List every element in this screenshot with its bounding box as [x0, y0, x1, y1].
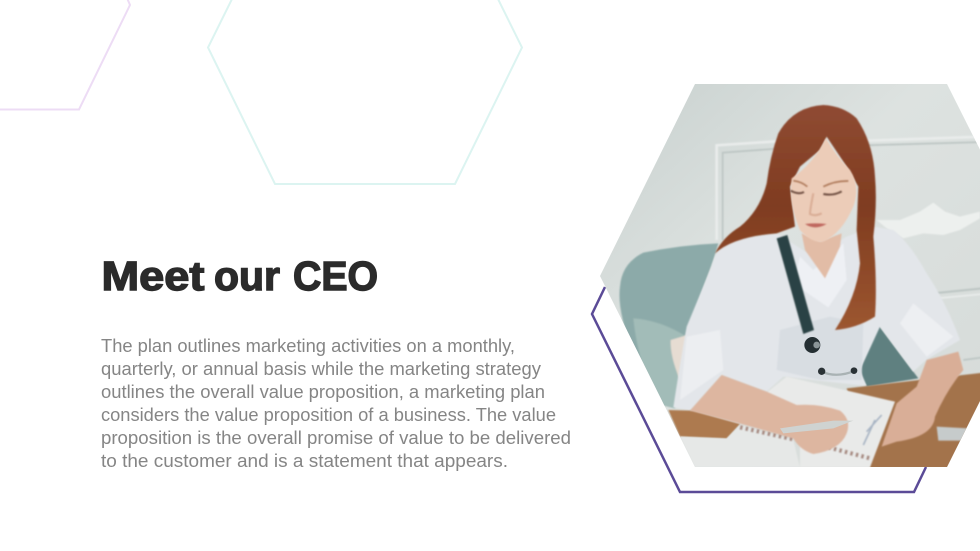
title: Meet [102, 253, 205, 299]
neck [802, 233, 842, 278]
body paragraph: The plan outlines marketing activities on a monthly, [101, 336, 515, 356]
right forearm and hand [882, 352, 963, 447]
wall moulding [717, 137, 980, 360]
handwriting [863, 415, 882, 445]
title [102, 253, 378, 299]
decorative hexagon outline: purple [592, 287, 926, 492]
pill pack [937, 427, 968, 441]
wall ornament [877, 203, 980, 238]
title: our [214, 253, 280, 299]
coat shading [680, 243, 953, 400]
body paragraph [101, 336, 571, 471]
body paragraph: quarterly, or annual basis while the marketing strategy [101, 359, 541, 379]
facial features [791, 181, 848, 227]
pen [780, 421, 853, 433]
white coat [673, 227, 960, 411]
wall background [580, 80, 980, 473]
body paragraph: considers the value proposition of a business. The value [101, 405, 556, 425]
armchair [619, 243, 918, 408]
table [668, 373, 980, 468]
stethoscope [777, 235, 857, 375]
left forearm and hand [690, 375, 848, 454]
hair [715, 105, 876, 330]
body paragraph: to the customer and is a statement that appears. [101, 451, 508, 471]
notebook [680, 377, 895, 467]
title: CEO [293, 253, 378, 299]
body paragraph: outlines the overall value proposition, a marketing plan [101, 382, 545, 402]
face [791, 138, 856, 242]
decorative hexagon outline: pink [0, 0, 130, 110]
hexagon photo: doctor writing at a desk [580, 80, 980, 473]
decorative hexagon outline: teal [208, 0, 522, 184]
body paragraph: proposition is the overall promise of value to be delivered [101, 428, 571, 448]
